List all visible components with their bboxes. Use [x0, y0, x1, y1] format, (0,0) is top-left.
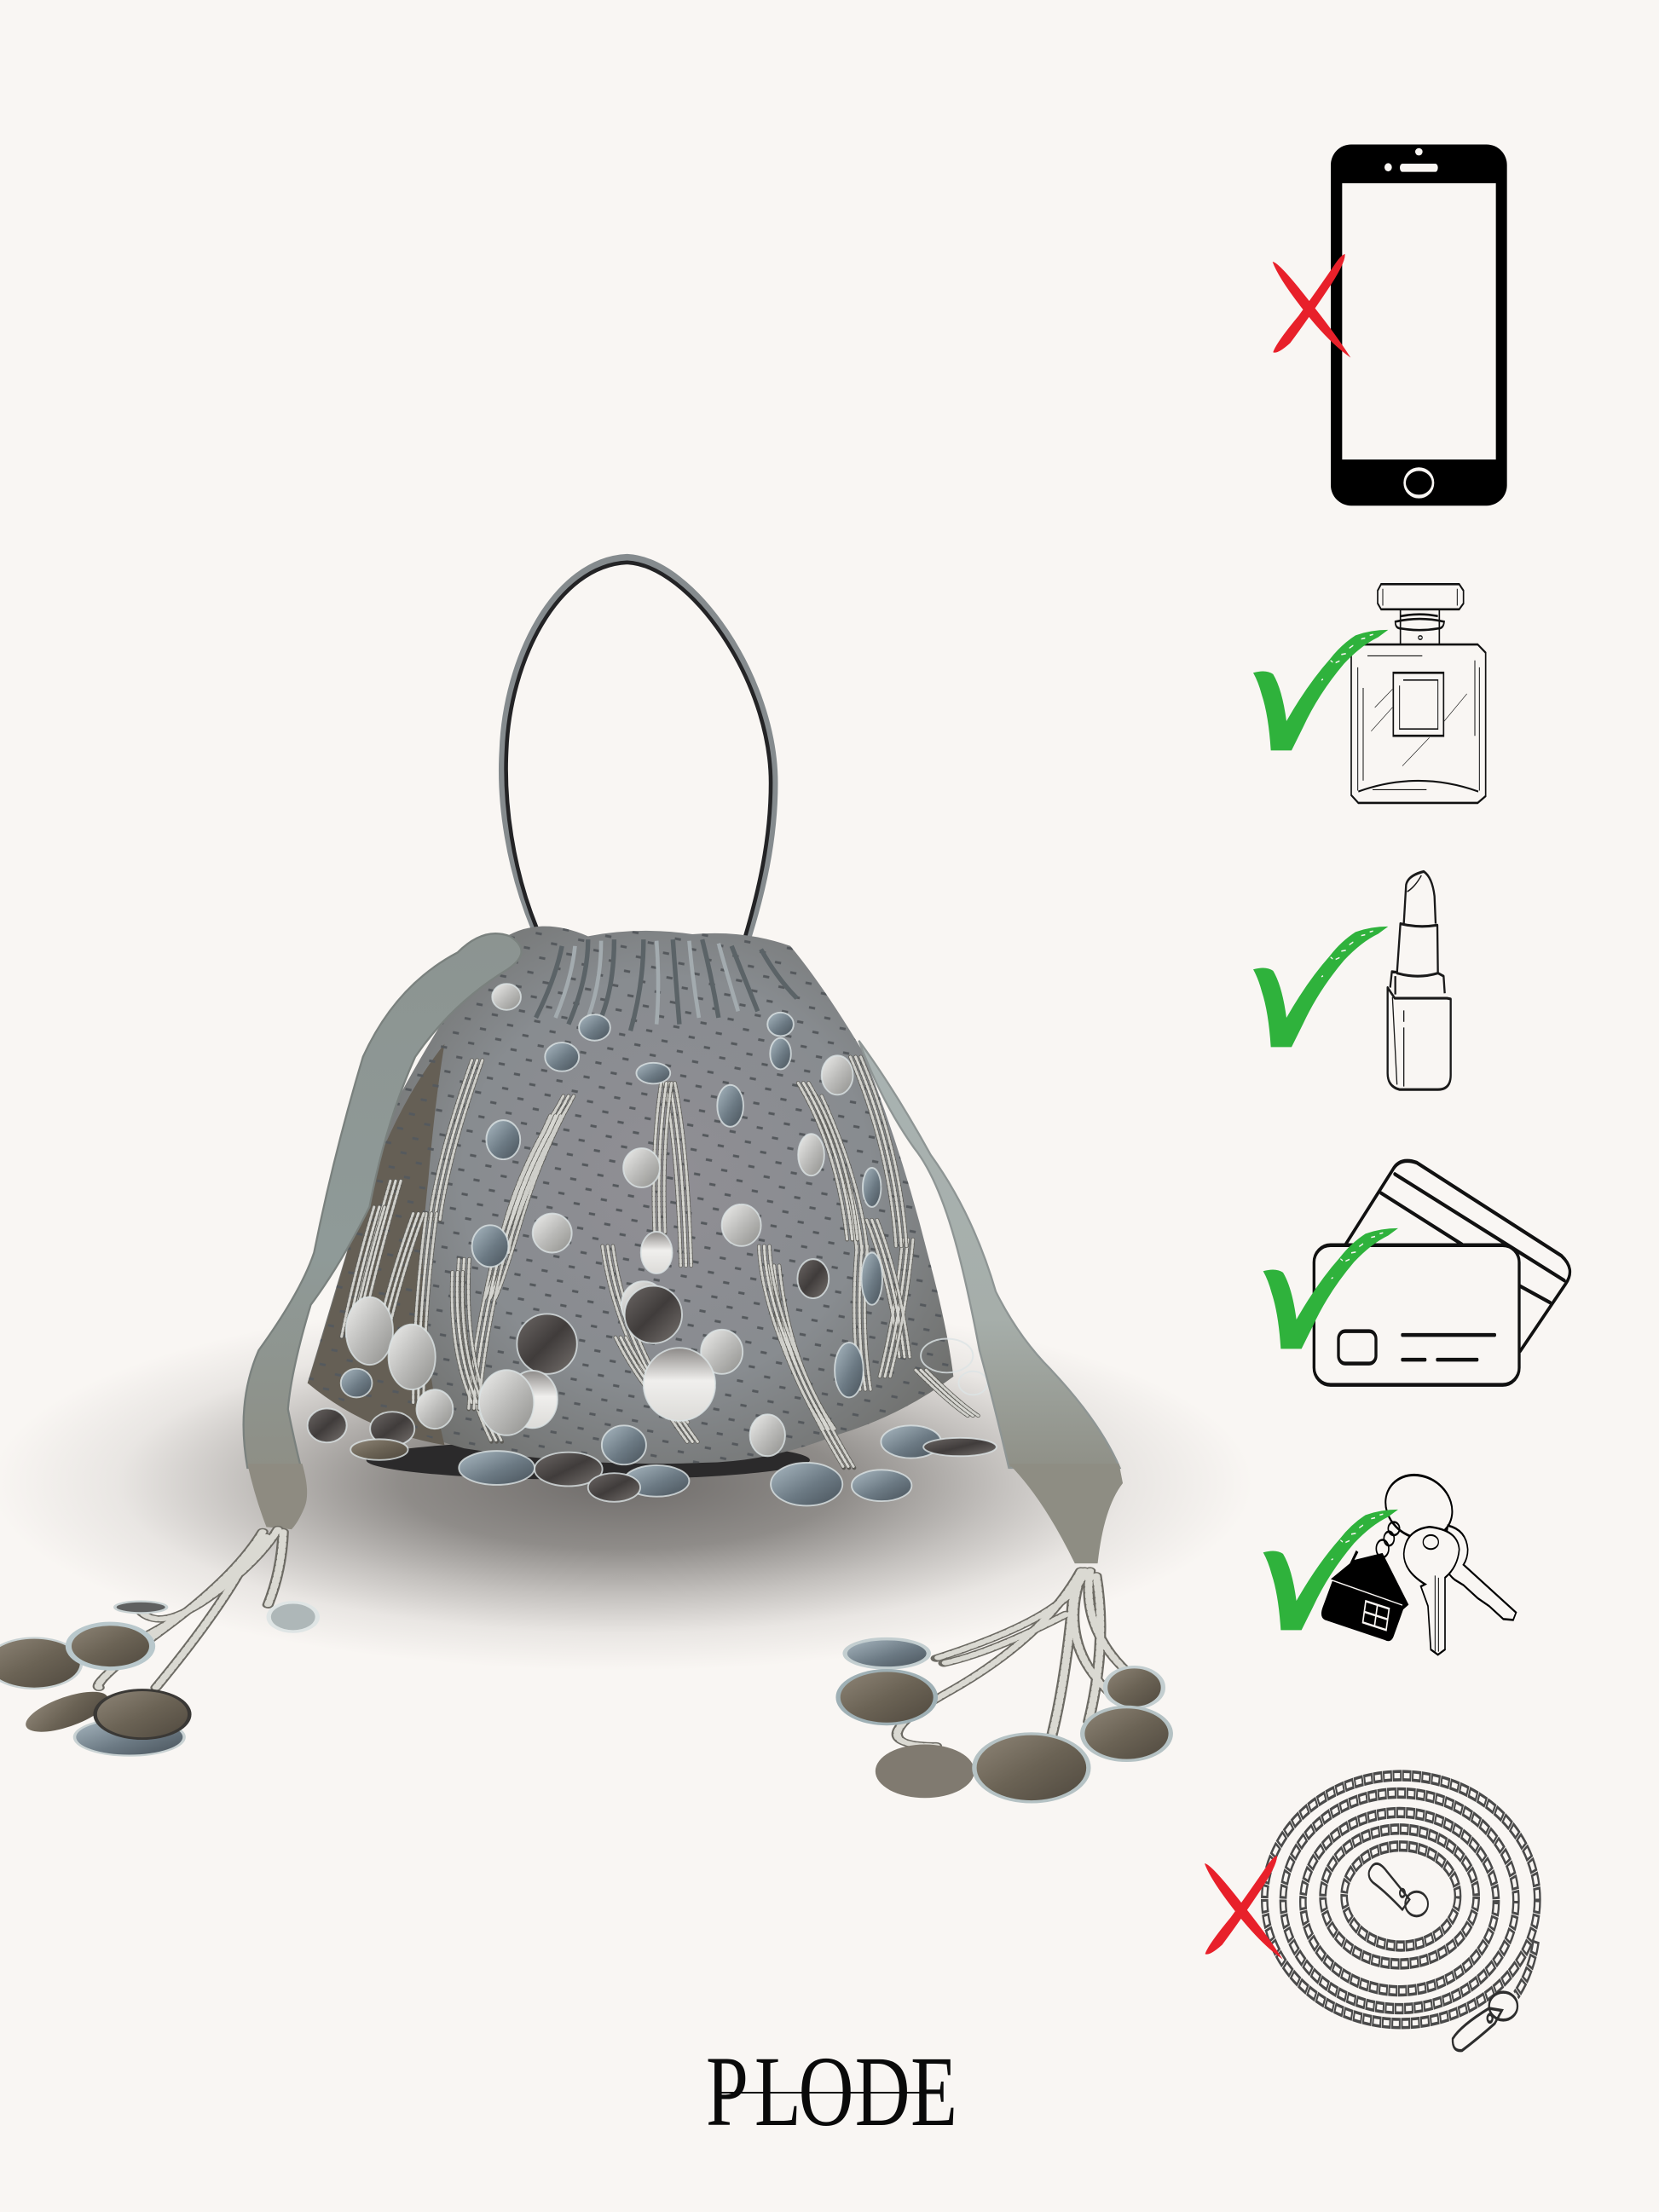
green check: included	[1263, 1510, 1398, 1630]
left strap end	[247, 1464, 307, 1529]
icon: bank cards with green check	[1263, 1161, 1569, 1385]
red cross: not included	[1205, 1856, 1283, 1960]
keys illustration	[1321, 1469, 1516, 1655]
keyring links	[1376, 1522, 1400, 1557]
coiled chain	[1264, 1776, 1537, 2024]
second key	[1443, 1526, 1516, 1620]
green check: included	[1253, 927, 1388, 1047]
green check: included	[1253, 630, 1388, 750]
floor shadow under bag	[0, 1296, 1253, 1671]
green check: included	[1263, 1228, 1398, 1349]
beaded tassel strands	[98, 1529, 1134, 1746]
right tassel mirror discs	[838, 1639, 1171, 1802]
dark underside of bag	[367, 1441, 810, 1480]
bag handle	[503, 557, 774, 936]
lipstick	[1388, 871, 1451, 1089]
chain illustration	[1264, 1776, 1537, 2051]
bag body	[308, 927, 953, 1464]
red cross: not included	[1273, 254, 1350, 358]
right strap end	[1009, 1464, 1123, 1563]
beaded fringe strands	[342, 1057, 978, 1468]
key ring	[1383, 1469, 1455, 1545]
wordmark crossbar	[720, 2092, 936, 2094]
perfume bottle	[1351, 584, 1486, 803]
left tassel mirror discs	[0, 1602, 317, 1756]
icon: coiled metal chain strap with red cross	[1205, 1776, 1537, 2051]
right ribbon strap	[858, 1041, 1120, 1468]
product photo: beaded drawstring bag	[244, 557, 1120, 1505]
icon: house keys with green check	[1263, 1469, 1516, 1655]
first key	[1404, 1527, 1460, 1655]
cards	[1314, 1161, 1569, 1385]
left ribbon strap	[244, 933, 522, 1468]
outer clasp	[1453, 1992, 1517, 2051]
house keychain	[1321, 1551, 1408, 1641]
icon: smartphone with red cross	[1273, 144, 1507, 505]
strap ends and beaded tassels	[0, 1464, 1171, 1802]
wordmark letters: PLODE	[706, 2036, 957, 2147]
icon: lipstick with green check	[1253, 871, 1451, 1089]
icon: perfume bottle with green check	[1253, 584, 1486, 803]
mirror sequins	[308, 984, 997, 1505]
phone	[1331, 144, 1507, 505]
inner clasp	[1369, 1863, 1428, 1916]
